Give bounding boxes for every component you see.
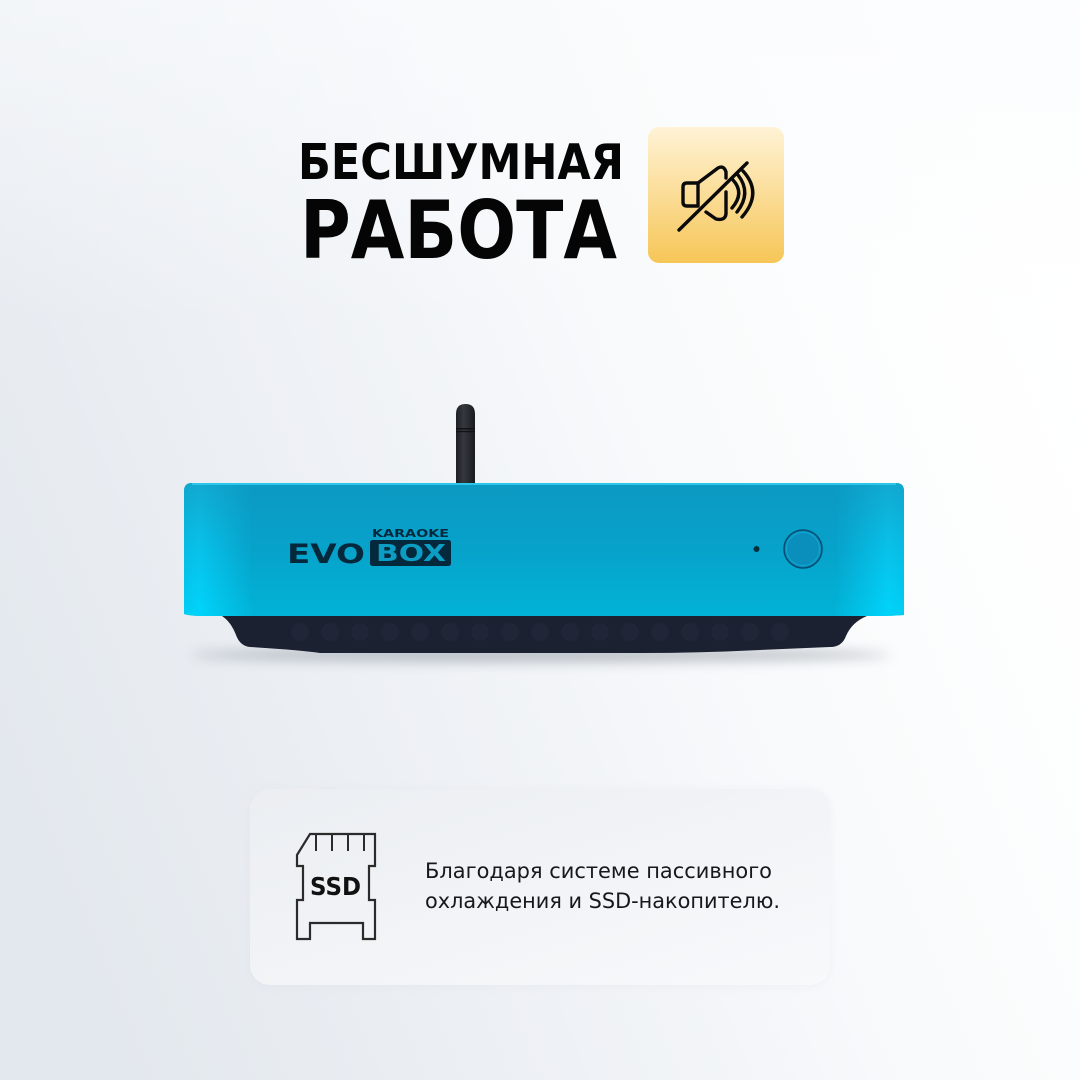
description text: Благодаря системе пассивного bbox=[425, 859, 772, 884]
icon: SSD card: SSD bbox=[310, 872, 361, 901]
icon: SSD card bbox=[297, 834, 375, 939]
logo: Evobox Karaoke bbox=[287, 527, 451, 570]
title: РАБОТА bbox=[300, 184, 617, 277]
description text: охлаждения и SSD-накопителю. bbox=[425, 889, 780, 914]
device body bbox=[184, 483, 904, 616]
title bbox=[298, 134, 624, 277]
power button bbox=[784, 530, 822, 568]
indicator light bbox=[754, 546, 760, 552]
logo: Evobox Karaoke: BOX bbox=[376, 541, 446, 567]
panel: description bbox=[250, 789, 830, 985]
logo: Evobox Karaoke: KARAOKE bbox=[372, 527, 449, 540]
device base bbox=[222, 616, 867, 653]
icon: muted speaker bbox=[648, 127, 784, 263]
logo: Evobox Karaoke: EVO bbox=[287, 539, 365, 570]
title: БЕСШУМНАЯ bbox=[298, 134, 624, 191]
description text bbox=[425, 859, 780, 914]
antenna bbox=[456, 404, 475, 484]
device shadow bbox=[190, 648, 890, 662]
